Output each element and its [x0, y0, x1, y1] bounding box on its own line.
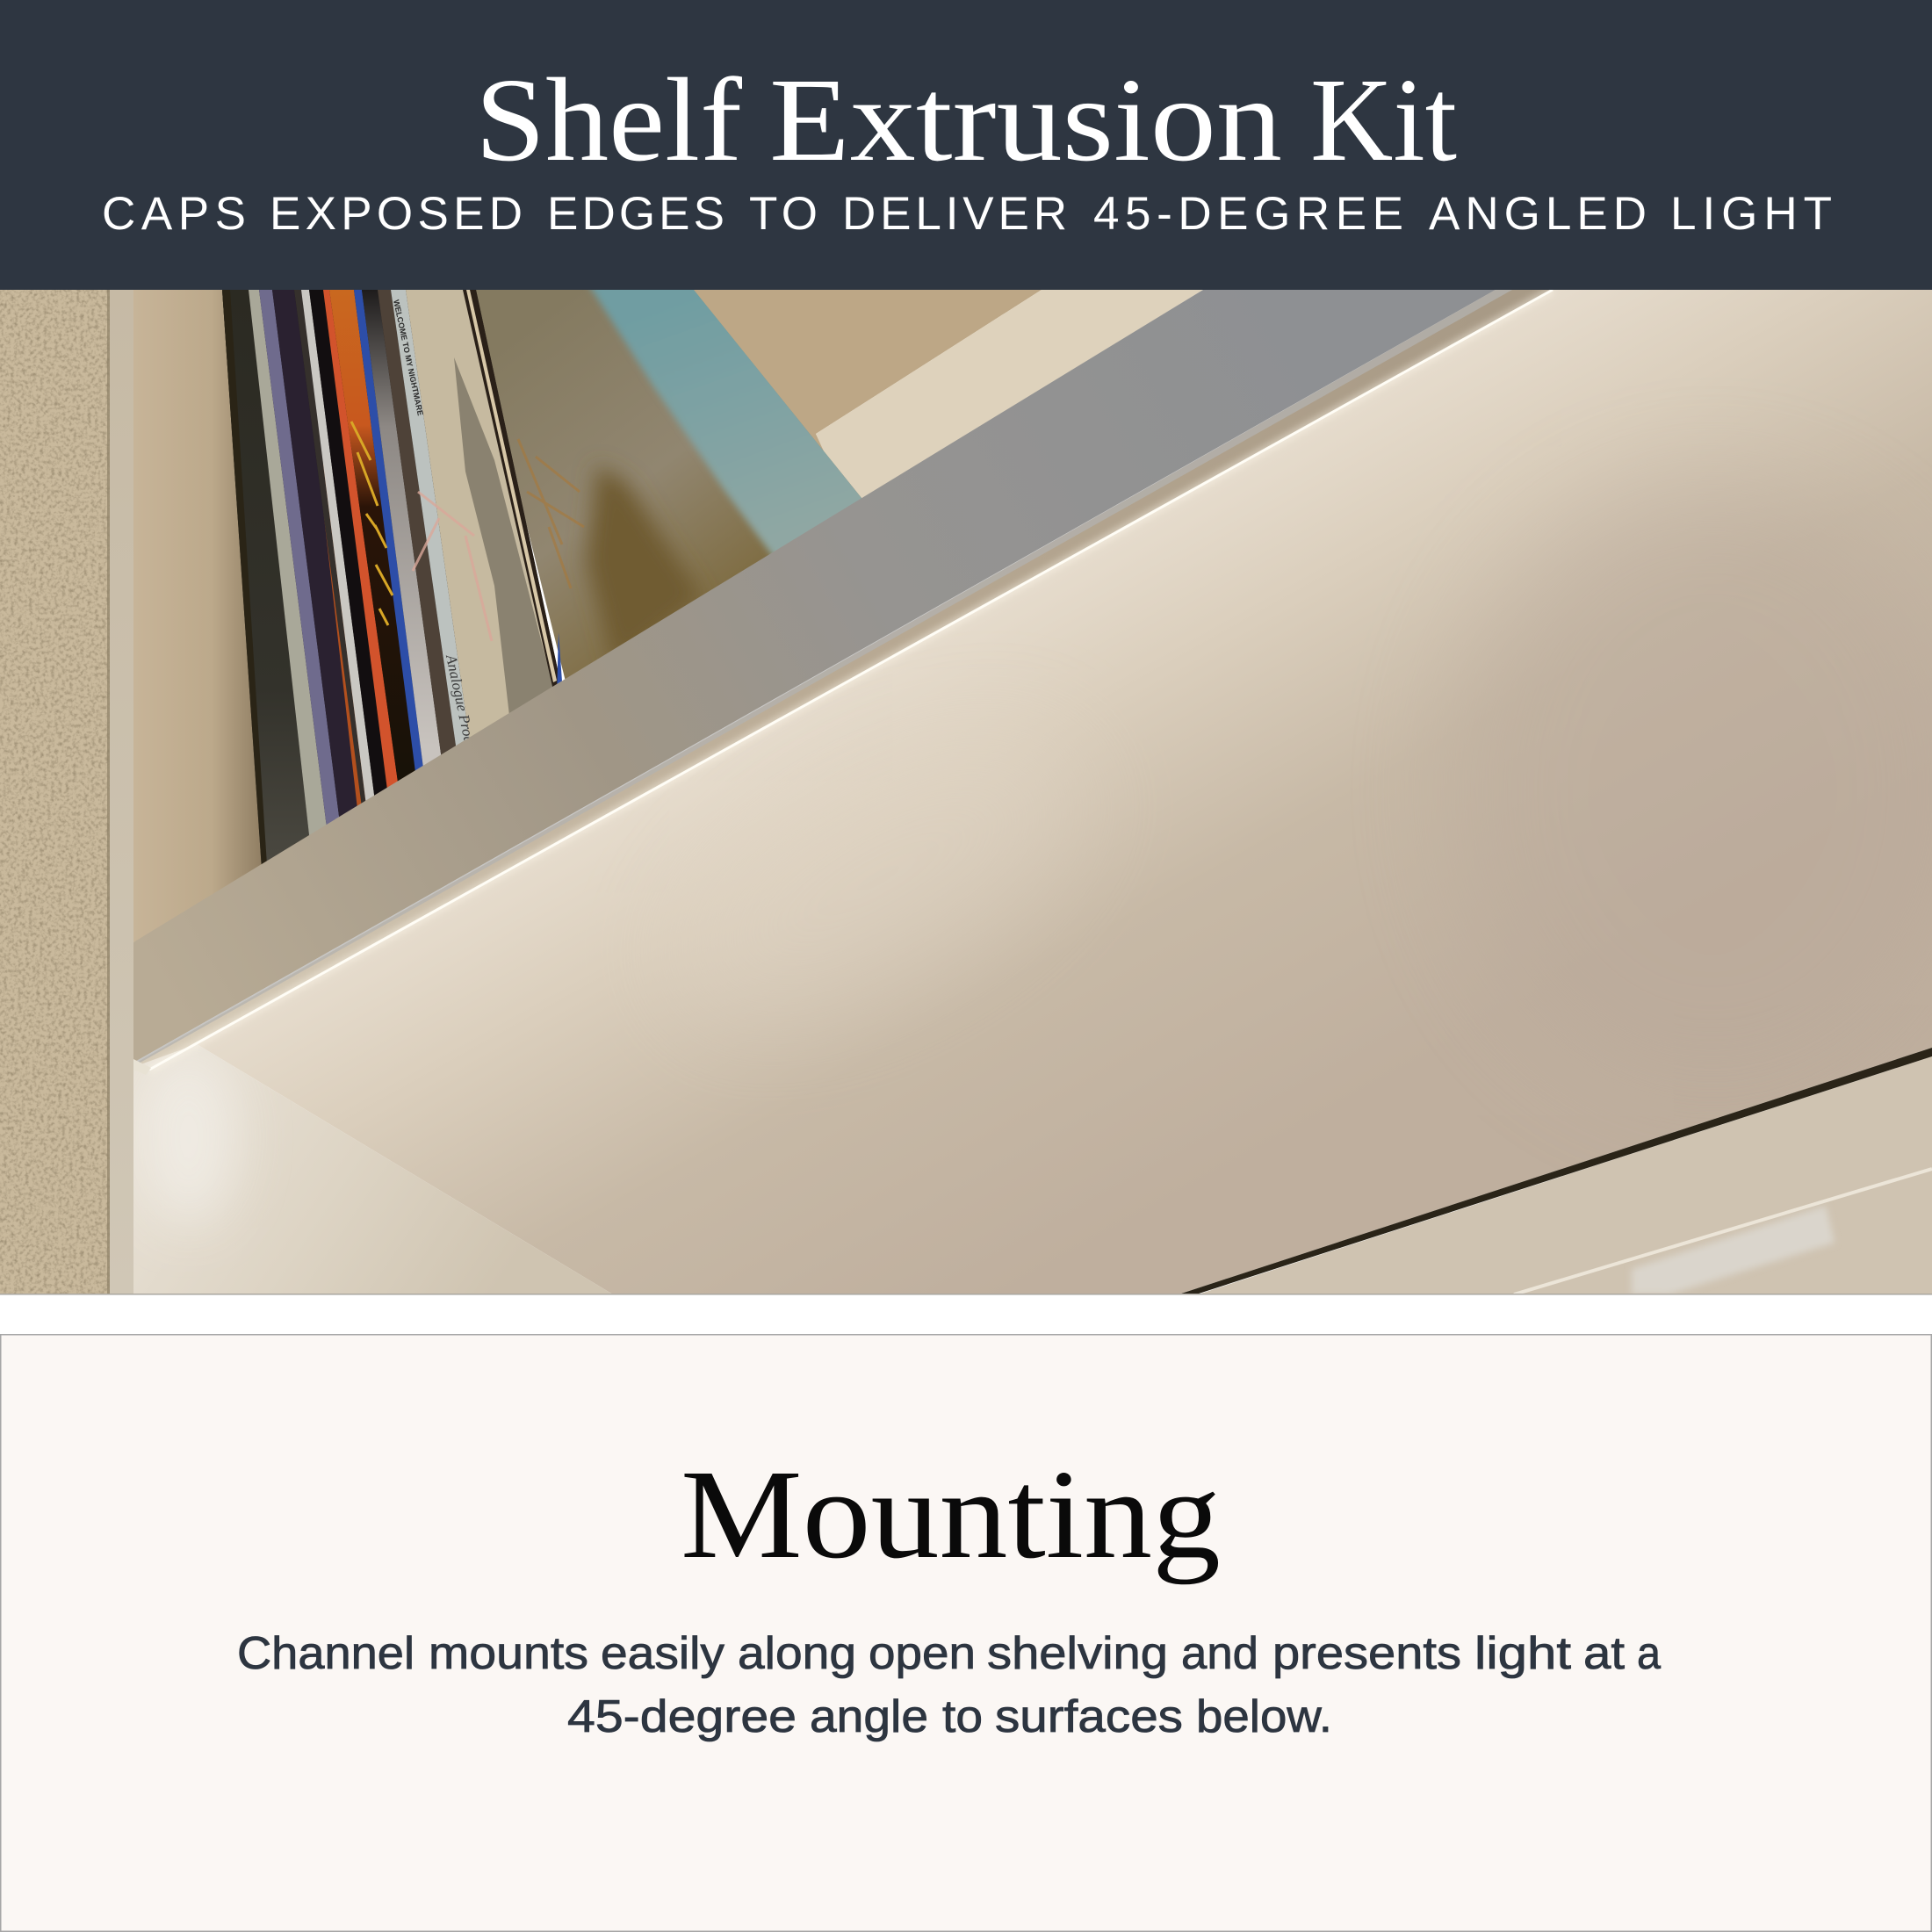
cabinet side strip — [110, 290, 133, 1294]
subtitle: CAPS — [102, 188, 246, 240]
lower shelf surface — [1198, 1056, 1932, 1294]
body text: angle — [810, 1691, 928, 1742]
subtitle: DELIVER — [842, 188, 1067, 240]
body text: surfaces — [995, 1691, 1183, 1742]
mounting panel — [1, 1335, 1931, 1931]
body text: presents — [1272, 1628, 1461, 1679]
channel strip — [133, 290, 1553, 1070]
teal sky of the cover — [588, 290, 861, 555]
spine script text: Analogue Prod — [443, 652, 478, 746]
black gap line — [1179, 1048, 1932, 1294]
body text: 45-degree — [567, 1691, 797, 1742]
title: Extrusion — [769, 54, 1282, 186]
underside soft shading — [627, 483, 1932, 1098]
shelf underside strip — [816, 290, 1203, 501]
subtitle: EXPOSED — [270, 188, 523, 240]
channel lip highlight — [133, 290, 1512, 1064]
title: Kit — [1310, 54, 1457, 186]
subtitle: LIGHT — [1670, 188, 1832, 240]
record spines — [222, 290, 563, 887]
photo: lit shelf with records — [0, 263, 1932, 1294]
dark mound on the cover — [587, 465, 703, 667]
body text: mounts — [429, 1628, 588, 1679]
body text: at — [1583, 1628, 1626, 1679]
subtitle: ANGLED — [1429, 188, 1647, 240]
cabinet back panel — [133, 290, 262, 942]
header panel — [0, 0, 1932, 290]
body text: light — [1474, 1628, 1572, 1679]
subtitle: EDGES — [547, 188, 724, 240]
subtitle: TO — [749, 188, 818, 240]
subtitle: 45-DEGREE — [1093, 188, 1403, 240]
reflected pale rectangle — [1514, 1169, 1932, 1294]
body text: and — [1181, 1628, 1258, 1679]
heading: Mounting — [681, 1445, 1221, 1585]
title — [475, 54, 1457, 186]
cream sleeve shaded side — [454, 357, 555, 716]
body text: along — [738, 1628, 856, 1679]
body text — [237, 1628, 1661, 1742]
orange branch marks — [518, 439, 584, 588]
body text: a — [1637, 1628, 1661, 1679]
body text: easily — [601, 1628, 724, 1679]
LED light line — [149, 290, 1553, 1070]
wall texture — [0, 290, 110, 1294]
title: Shelf — [475, 54, 743, 186]
spine text: WELCOME TO MY NIGHTMARE — [392, 299, 425, 416]
shelf front face — [133, 290, 1496, 1063]
body text: Channel — [237, 1628, 415, 1679]
body text: open — [869, 1628, 976, 1679]
shelf underside panel — [149, 290, 1932, 1294]
end cap — [133, 1059, 151, 1075]
upper wall behind records — [694, 290, 1042, 451]
subtitle — [102, 188, 1832, 240]
yellow dashes — [351, 422, 393, 625]
large record cover — [476, 290, 862, 680]
lower left wall with glow — [133, 1044, 613, 1294]
body text: to — [942, 1691, 983, 1742]
body text: below. — [1196, 1691, 1332, 1742]
body text: shelving — [987, 1628, 1168, 1679]
